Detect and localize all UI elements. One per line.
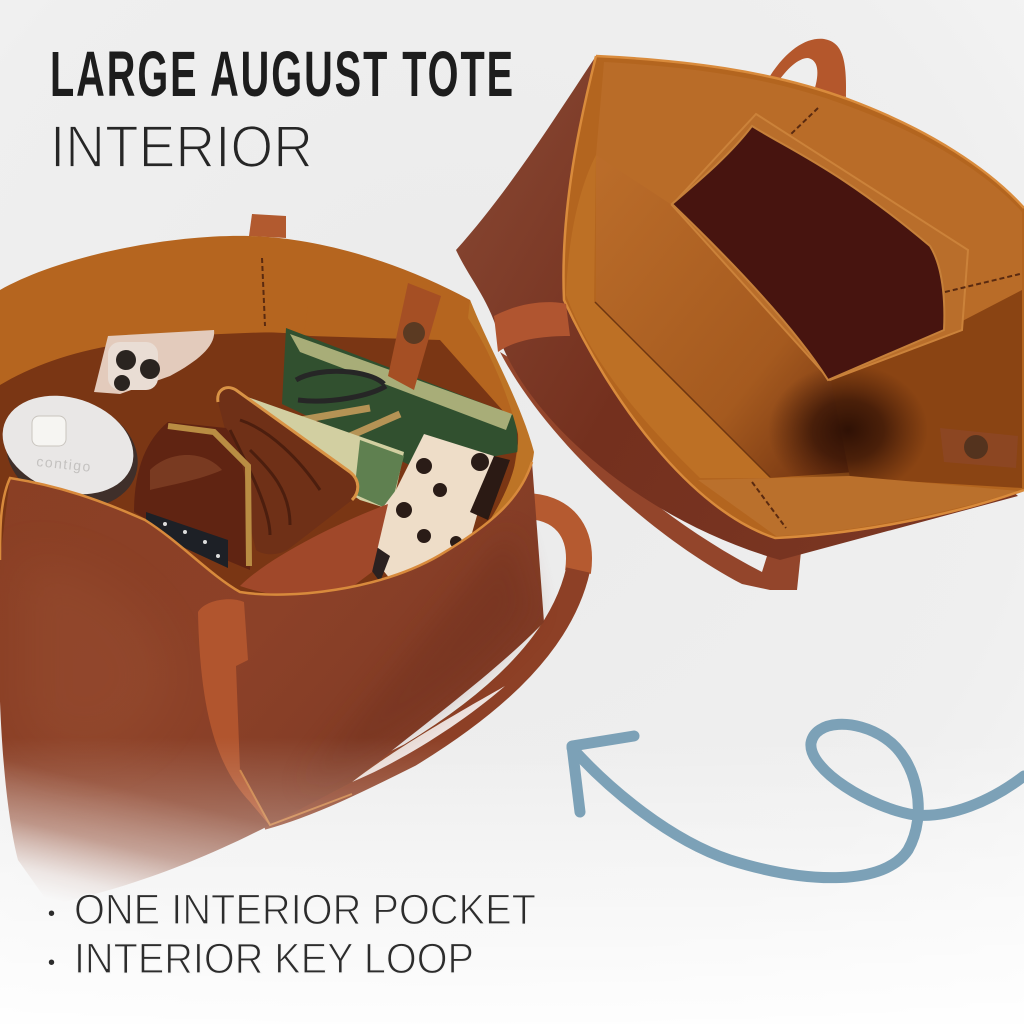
polka dot pouch	[146, 512, 228, 568]
left bag front panel	[0, 462, 544, 905]
bullet: interior key loop: INTERIOR KEY LOOP	[74, 935, 474, 983]
key loop snap	[964, 435, 988, 459]
right bag lower handle	[500, 352, 802, 590]
inner leather pocket fold	[240, 504, 388, 598]
right bag rim stitching	[563, 56, 1024, 538]
left bag interior right lining	[468, 300, 534, 518]
bullet: one interior pocket: ONE INTERIOR POCKET	[74, 886, 536, 934]
right bag left outer side	[456, 56, 1018, 560]
zip pouch	[134, 422, 250, 570]
right bag stitch marks	[752, 108, 1020, 528]
bullet: interior key loop: •	[48, 952, 55, 974]
gap sheet behind handle	[352, 686, 505, 782]
cream notebook	[248, 397, 404, 506]
green notebook	[282, 328, 518, 470]
tumbler	[2, 396, 138, 503]
right bag inner fold wall	[566, 155, 770, 478]
front panel shading	[364, 573, 546, 773]
tumbler brand: contigo	[36, 453, 93, 475]
strap seam	[240, 770, 352, 825]
right bag floor crease	[595, 302, 770, 477]
front panel highlight	[20, 560, 170, 755]
right bag side strap tab	[494, 302, 570, 352]
polka dot scarf	[372, 434, 510, 580]
front strap tab	[198, 599, 270, 826]
phone	[94, 330, 214, 394]
pocket flap	[268, 332, 286, 333]
right bag interior	[563, 56, 1024, 538]
arrow: curly blue arrow	[572, 724, 1024, 878]
pouch zipper	[168, 426, 249, 566]
interior pocket	[0, 332, 520, 610]
right bag pocket	[672, 114, 968, 380]
left bag top handle	[249, 214, 286, 238]
long handle	[262, 506, 579, 818]
front rim stitching	[0, 462, 532, 595]
right bag interior shadow	[768, 364, 928, 496]
right bag upper wall suede	[596, 62, 1022, 376]
right bag key loop	[940, 428, 1018, 468]
right bag floor	[596, 155, 855, 478]
key loop strap	[388, 283, 441, 390]
bullet: one interior pocket: •	[48, 903, 55, 925]
right bag far handle	[770, 39, 846, 97]
bullet list	[48, 886, 536, 983]
title: LARGE AUGUST TOTE	[50, 40, 513, 110]
pocket stitch marks	[262, 258, 265, 326]
pouch highlight	[150, 455, 222, 490]
keys	[278, 371, 400, 436]
subtitle: INTERIOR	[50, 114, 313, 180]
left bag interior back wall	[0, 236, 518, 468]
right bag lower right wall	[830, 290, 1022, 488]
left bag: filled with items	[0, 214, 579, 905]
tooled wallet	[218, 388, 358, 554]
right bag bottom flap	[698, 476, 1018, 536]
right bag: top-down interior view	[456, 39, 1024, 590]
